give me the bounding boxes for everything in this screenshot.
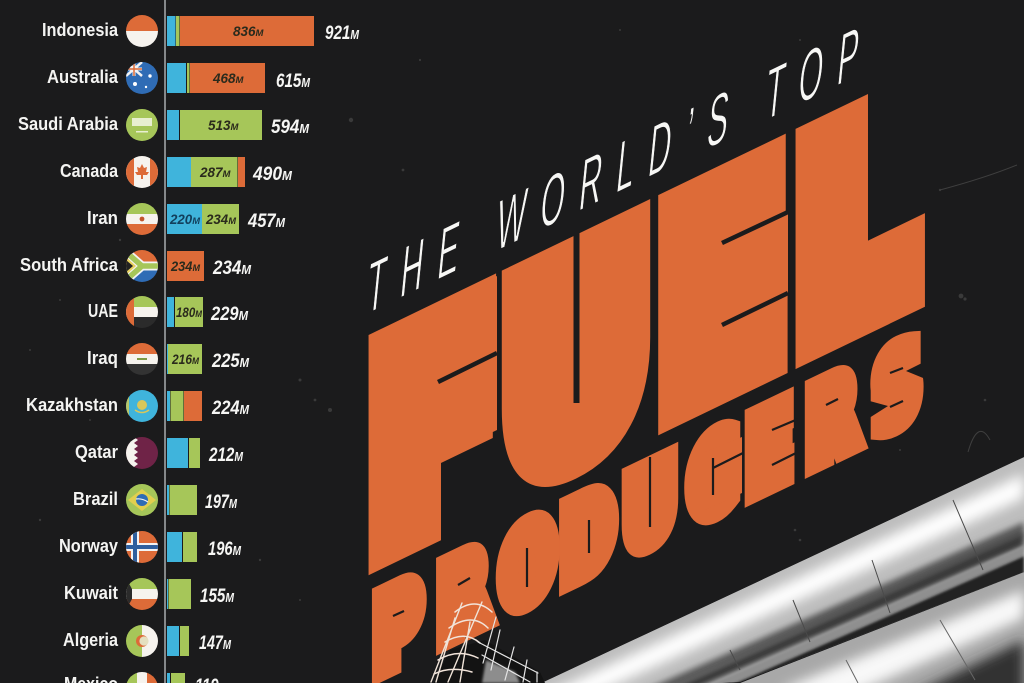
bars: Iraq: 216M: [171, 352, 200, 367]
ladder tower: [431, 602, 545, 683]
row: Kuwait: 155M: [200, 586, 235, 607]
row: UAE: 229M: [210, 304, 249, 325]
row: Australia: 615M: [276, 71, 311, 92]
lower pipe: [740, 572, 1024, 683]
row: Iraq: 225M: [211, 351, 250, 372]
bars: Kuwait: [167, 579, 191, 609]
row: Mexico: [64, 672, 228, 683]
row: Norway: 196M: [208, 539, 242, 560]
bars: Algeria: [167, 626, 189, 656]
row: Indonesia: 921M: [325, 23, 360, 44]
bars: South Africa: 234M: [170, 259, 201, 274]
bar chart: fuel production by country: [18, 15, 360, 683]
bars: Brazil: [167, 485, 197, 515]
bars: Saudi Arabia: [167, 110, 262, 140]
row: Canada: 490M: [252, 164, 293, 185]
bars: Qatar: [167, 438, 200, 468]
row: Algeria: [63, 625, 232, 657]
row: Brazil: [73, 484, 238, 516]
bars: Indonesia: 836M: [233, 24, 265, 39]
title line: THE WORLD'S TOP: THE WORLD’S TOP: [363, 11, 863, 332]
bars: Kazakhstan: [167, 391, 202, 421]
bars: Iran: 234M: [205, 212, 237, 227]
row: Iraq: [87, 343, 250, 375]
row: UAE: [88, 296, 249, 328]
row: Indonesia: [42, 15, 360, 47]
row: South Africa: [20, 250, 252, 282]
row: Qatar: 212M: [208, 445, 244, 466]
row: Saudi Arabia: [18, 109, 310, 141]
flag: Saudi Arabia: [126, 109, 158, 141]
row: Iraq: Iraq: [87, 348, 118, 368]
title word: FUEL: FUEL: [373, 53, 910, 604]
vertical axis line: [164, 0, 166, 683]
flag: Kuwait: [126, 578, 158, 610]
bars: Indonesia: [167, 16, 314, 46]
row: Kazakhstan: 224M: [211, 398, 250, 419]
flag: South Africa: [126, 250, 158, 282]
bars: Iran: 220M: [169, 212, 201, 227]
row: Algeria: Algeria: [63, 630, 119, 650]
bars: Norway: [167, 532, 197, 562]
flag: Brazil: [126, 484, 158, 516]
row: Kuwait: Kuwait: [64, 583, 118, 603]
row: Qatar: [75, 437, 244, 469]
bars: Saudi Arabia: 513M: [208, 118, 240, 133]
bars: South Africa: [167, 251, 204, 281]
flag: Indonesia: [126, 15, 158, 47]
flag: Mexico: [126, 672, 158, 683]
bars: UAE: 180M: [176, 305, 203, 320]
row: Canada: [60, 156, 293, 188]
bars: Australia: [167, 63, 265, 93]
row: Saudi Arabia: 594M: [271, 117, 310, 138]
row: Kazakhstan: [26, 390, 250, 422]
flag: Qatar: [126, 437, 158, 469]
flag: Canada: [126, 156, 158, 188]
row: Algeria: 147M: [199, 633, 232, 654]
row: Iran: [87, 203, 286, 235]
row: Brazil: Brazil: [73, 489, 118, 509]
row: Australia: Australia: [47, 67, 119, 87]
bars: Canada: [167, 157, 245, 187]
bars: Iran: [167, 204, 239, 234]
bars: Mexico: [167, 673, 185, 683]
row: Kuwait: [64, 578, 235, 610]
row: South Africa: 234M: [212, 258, 252, 279]
row: Iran: Iran: [87, 208, 118, 228]
title word: PRODUCERS: PRODUCERS: [375, 321, 919, 683]
flag: UAE: [126, 296, 158, 328]
bars: Canada: 287M: [199, 165, 232, 180]
flag: Norway: [126, 531, 158, 563]
upper pipe: [520, 457, 1024, 683]
bars: UAE: [167, 297, 203, 327]
row: Kazakhstan: Kazakhstan: [26, 395, 118, 415]
bars: Australia: 468M: [212, 71, 245, 86]
row: Canada: Canada: [60, 161, 119, 181]
row: Norway: Norway: [59, 536, 118, 556]
row: Norway: [59, 531, 242, 563]
pipes photo: [520, 457, 1024, 683]
flag: Australia: [126, 62, 158, 94]
flag: Iran: [126, 203, 158, 235]
row: Australia: [47, 62, 311, 94]
bars: Iraq: [167, 344, 202, 374]
flag: Kazakhstan: [126, 390, 158, 422]
flag: Algeria: [126, 625, 158, 657]
flag: Iraq: [126, 343, 158, 375]
row: Indonesia: Indonesia: [42, 20, 119, 40]
row: South Africa: South Africa: [20, 255, 119, 275]
row: Saudi Arabia: Saudi Arabia: [18, 114, 119, 134]
row: Iran: 457M: [247, 211, 286, 232]
row: Qatar: Qatar: [75, 442, 118, 462]
row: UAE: UAE: [88, 301, 118, 321]
row: Brazil: 197M: [205, 492, 238, 513]
